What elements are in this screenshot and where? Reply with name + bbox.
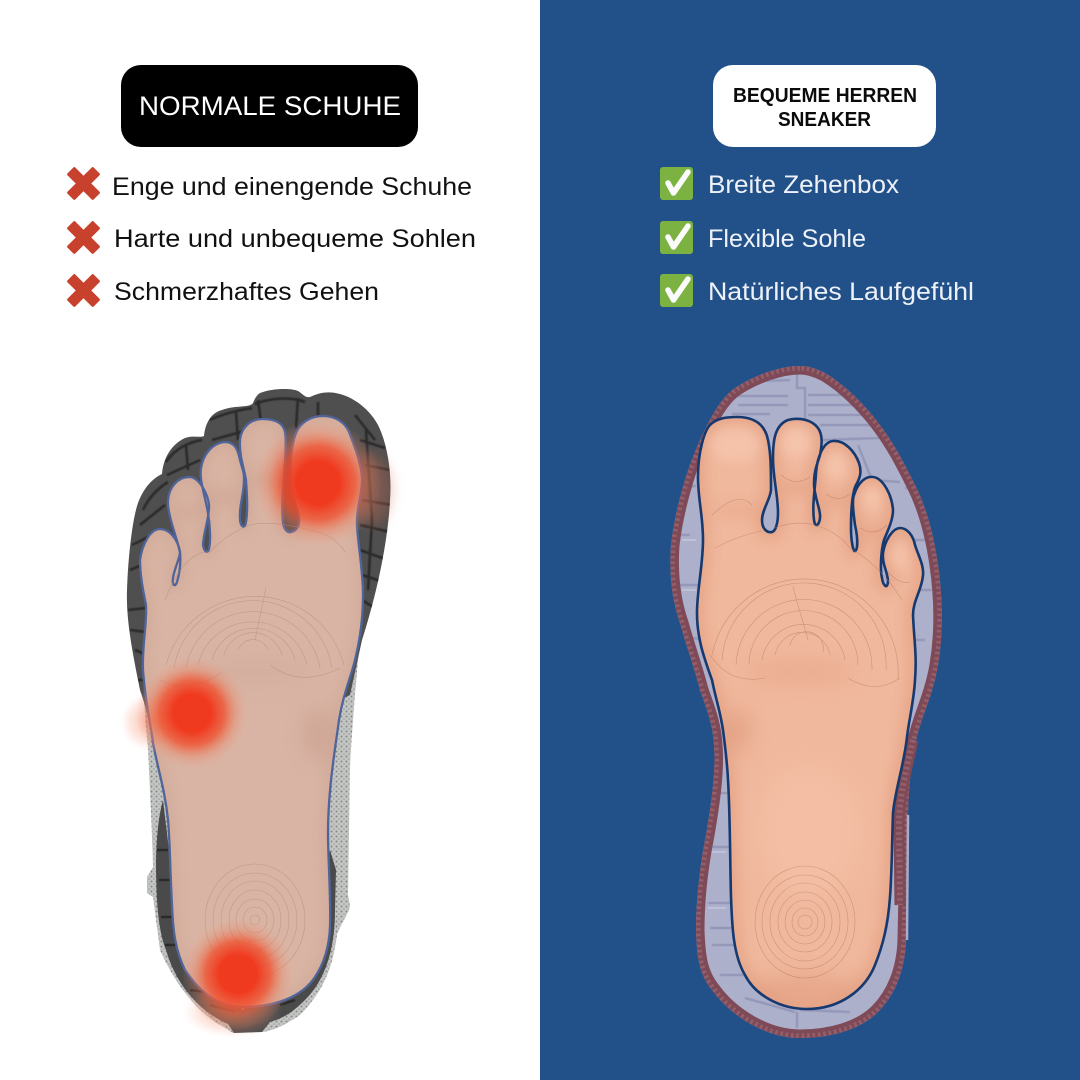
icon: red cross 3: [67, 274, 100, 307]
heading: bequeme herren sneaker: [713, 65, 936, 147]
text: benefit 2: Flexible Sohle: [708, 225, 866, 253]
panel: comfortable sneakers: [660, 65, 974, 1038]
skin: left foot: [140, 416, 363, 1007]
heading: normale schuhe: [121, 65, 418, 147]
icon: green check 2: [660, 221, 693, 254]
text: drawback 3: Schmerzhaftes Gehen: [114, 278, 379, 306]
lavender sole: [670, 366, 942, 1038]
list: drawbacks: [67, 167, 476, 307]
text: drawback 2: Harte und unbequeme Sohlen: [114, 225, 476, 253]
icon: red cross 1: [67, 167, 100, 200]
maroon outsole rim: [670, 366, 942, 1038]
list: benefits: [660, 167, 974, 307]
icon: red cross 2: [67, 221, 100, 254]
text: drawback 1: Enge und einengende Schuhe: [112, 173, 472, 201]
ridges and creases: [710, 475, 910, 978]
maroon rim inner along heel right: [899, 740, 913, 905]
text: benefit 3: Natürliches Laufgefühl: [708, 278, 974, 306]
icon: green check 1: [660, 167, 693, 200]
heading: bequeme herren sneaker: BEQUEME HERREN: [733, 84, 917, 107]
pain spot: side: [120, 657, 248, 769]
panel: normal shoes: [67, 65, 476, 1038]
panel: blue right background: [540, 0, 1080, 1080]
icon: green check 3: [660, 274, 693, 307]
ridges and creases: [160, 523, 345, 976]
heading: normale schuhe: NORMALE SCHUHE: [139, 91, 401, 121]
pain spot: heel: [182, 918, 294, 1038]
mesh upper: [143, 640, 360, 1033]
sole tint near pain: [352, 454, 392, 526]
illustration: foot in wide sneaker: [670, 366, 942, 1038]
lavender highlight outer right: [907, 815, 908, 940]
dark sole: [127, 389, 392, 1033]
illustration: foot squeezed in normal shoe: [120, 389, 392, 1038]
heading: bequeme herren sneaker: SNEAKER: [778, 108, 871, 131]
pain spot: big toe: [254, 419, 382, 547]
text: benefit 1: Breite Zehenbox: [708, 171, 900, 199]
skin: right foot: [697, 417, 923, 1009]
